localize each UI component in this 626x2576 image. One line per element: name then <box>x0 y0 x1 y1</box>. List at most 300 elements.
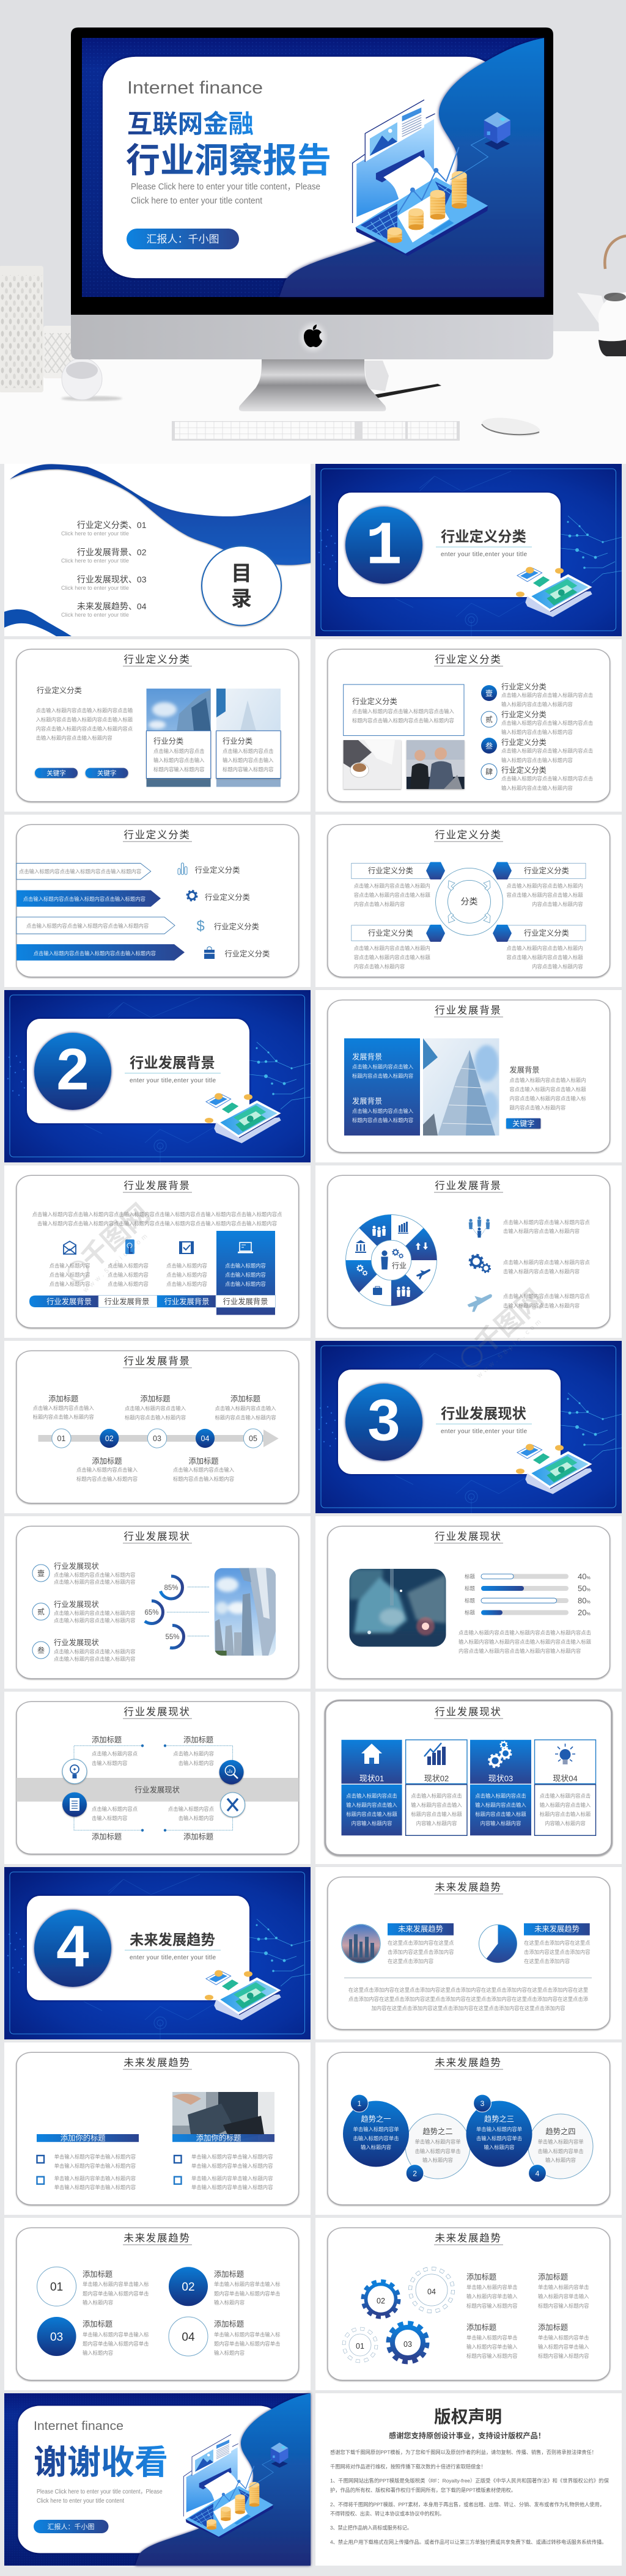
right text 3: 点击输入标题内容点击输入标题内容点 <box>503 1293 590 1299</box>
card 2: 行业分类 <box>223 737 252 746</box>
text bottom right <box>506 945 583 970</box>
card 现状03: 点击输入标题内容点击 <box>475 1793 526 1799</box>
lower paragraph: 加内容在这里点击添加内容这里点击添加内容在这里点击添加内容在这里点击添加内容 <box>371 2005 565 2011</box>
contents list: 行业发展现状、03 <box>77 574 147 584</box>
right text 2: 击输入标题内容点击输入标题内容 <box>503 1269 580 1275</box>
progress row 20%: 20% <box>578 1608 591 1617</box>
photo: hands with tablet <box>172 2092 274 2141</box>
header bar left <box>388 1923 454 1936</box>
badge 1 <box>350 2094 368 2112</box>
badge 1: 1 <box>357 2099 361 2108</box>
item 2: 点击输入标题内容点击输入标题内容 <box>54 1617 136 1623</box>
list item 1: 行业定义分类 <box>501 682 547 691</box>
text left: 击添加内容这里点击添加内容 <box>388 1949 454 1955</box>
notice body: 3、禁止把作品纳入商标或服务标记。 <box>330 2525 412 2531</box>
card 2: 点击输入标题内容点击 <box>223 748 273 754</box>
text bottom left: 标题内容输入标题内容 <box>466 2353 517 2359</box>
item 04: 输入标题内容 <box>214 2350 245 2356</box>
text top right: 点击输入标题内容点击输入标题内 <box>506 883 583 889</box>
highlighted column <box>216 1231 275 1315</box>
trend 3 circle: 击输入标题内容单击 <box>476 2135 522 2141</box>
right text: 内容点击输入标题内容点击输入标 <box>509 1096 586 1102</box>
hero subtitle: Please Click here to enter your title content，Please <box>131 182 320 192</box>
text top left: 点击输入标题内容点击输入标题内 <box>354 883 430 889</box>
top label 1: 标题内容点击输入标题内容 <box>33 1414 94 1420</box>
list item 4: 点击输入标题内容点击输入标题内容点击 <box>501 776 593 782</box>
contents list: 行业发展背景、02 <box>77 548 147 557</box>
notice body: 1、千图网网站出售的PPT模版是免版税类（RF：Royalty-free）正版受《中华人民共和国著作法》和《世界版权公约》的保 <box>330 2478 609 2484</box>
text top left: 单击输入标题内容单击 <box>466 2284 517 2291</box>
blue panel: 点击输入标题内容点击输入 <box>352 1108 414 1114</box>
text right: 在这里点击添加内容 <box>524 1958 570 1964</box>
text top right: 单击输入标题内容单击 <box>538 2284 589 2291</box>
text block <box>36 686 133 741</box>
keyboard <box>172 421 460 441</box>
card 现状03: 现状03 <box>488 1774 513 1783</box>
slide: copyright notice <box>315 2393 622 2566</box>
top label 3: 添加标题 <box>230 1395 260 1403</box>
item 01: 01 <box>50 2281 63 2294</box>
tab 2: 行业发展背景 <box>105 1297 149 1306</box>
bottom left wave <box>4 609 72 636</box>
list right 2 <box>174 2175 273 2190</box>
slide: section cover 3 <box>315 1341 622 1513</box>
card 现状02: 点击输入标题内容点击 <box>411 1793 462 1799</box>
ring 65% <box>141 1601 163 1623</box>
label top left: 击输入标题内容 <box>92 1760 127 1766</box>
central ring diagram <box>435 868 503 935</box>
node 04 <box>196 1429 215 1448</box>
subtitle <box>37 2489 163 2504</box>
list left 2: 单击输入标题内容单击输入标题内容 <box>54 2175 136 2181</box>
text card <box>344 684 464 736</box>
vase left <box>0 266 43 392</box>
text left <box>388 1940 454 1964</box>
teapot <box>577 236 626 356</box>
section subtitle: enter your title,enter your title <box>441 1428 527 1435</box>
node 01: 01 <box>57 1434 65 1443</box>
bottom label 1: 添加标题 <box>92 1457 122 1466</box>
text bottom left <box>354 945 431 970</box>
slide title: 行业发展现状 <box>435 1530 502 1543</box>
photo: coffee and laptop <box>344 740 401 789</box>
slide: thank you <box>4 2393 311 2566</box>
mouse <box>481 414 541 440</box>
wheel chart: 行业 <box>392 1261 407 1270</box>
label bottom left <box>92 1806 138 1841</box>
list left 1 <box>37 2154 136 2169</box>
section title: 行业定义分类 <box>441 529 526 545</box>
label with bag icon: 行业定义分类 <box>225 949 270 958</box>
text block: 击输入标题内容点击输入标题内容 <box>36 735 112 741</box>
notice body: 护，作品的所有权、版权和著作权归千图网所有，您下载的是PPT模版素材使用权。 <box>330 2487 516 2493</box>
monitor body <box>71 28 553 315</box>
section title: 未来发展趋势 <box>130 1932 215 1948</box>
header bar left: 未来发展趋势 <box>398 1924 443 1934</box>
card 2 <box>216 731 281 779</box>
hero: monitor mockup on desk <box>0 0 626 464</box>
reporter button <box>127 229 239 249</box>
hero subtitle <box>131 182 320 206</box>
list item 4: 肆 <box>485 768 493 776</box>
item 1: 点击输入标题内容点击输入标题内容 <box>54 1579 136 1585</box>
slide title: 行业发展背景 <box>435 1005 502 1016</box>
node 02: 02 <box>105 1434 114 1443</box>
list left 1: 单击输入标题内容单击输入标题内容 <box>54 2154 136 2160</box>
slide title: 未来发展趋势 <box>123 2057 191 2068</box>
contents circle <box>202 546 281 625</box>
illustration: tablet with money <box>516 567 592 617</box>
slide: current state, percent rings <box>4 1516 311 1689</box>
icon: tools <box>221 1793 245 1817</box>
card 现状03: 输入标题内容点击输入 <box>475 1802 526 1808</box>
gear 02 <box>363 2281 399 2317</box>
bottom label 1 <box>76 1457 138 1482</box>
progress row 50%: 50% <box>578 1584 591 1593</box>
item 1: 行业发展现状 <box>54 1561 99 1571</box>
text bottom right: 容点击输入标题内容点击输入标题 <box>506 955 583 961</box>
progress row 50%: 标题 <box>465 1585 476 1591</box>
list right 2: 单击输入标题内容单击输入标题内容 <box>191 2184 273 2190</box>
top label 3: 点击输入标题内容点击输入 <box>215 1406 276 1412</box>
trend 1 circle <box>343 2101 409 2167</box>
node 04: 04 <box>201 1434 209 1443</box>
list item 2: 输入标题内容点击输入标题内容 <box>501 729 573 735</box>
header bar right: 添加你的标题 <box>196 2133 241 2143</box>
badge 3: 3 <box>481 2099 485 2108</box>
right text: 题内容点击输入标题内容 <box>509 1105 565 1111</box>
list item 3: 行业定义分类 <box>501 738 547 747</box>
text bottom right <box>538 2323 589 2359</box>
ring 55%: 55% <box>165 1634 180 1641</box>
progress row 80%: 80% <box>578 1596 591 1605</box>
gear 01 <box>344 2328 377 2361</box>
text card: 行业定义分类 <box>352 697 397 706</box>
watermark 2: www.58pic.com <box>475 1316 545 1380</box>
card 现状04 <box>534 1740 595 1835</box>
reporter button: 汇报人：千小图 <box>147 233 219 245</box>
text top left: 输入标题内容单击输入 <box>466 2294 518 2300</box>
column text 4 <box>225 1263 266 1287</box>
list left 2: 单击输入标题内容单击输入标题内容 <box>54 2184 136 2190</box>
slide: development background, four columns <box>4 1165 311 1338</box>
text bottom right: 添加标题 <box>538 2323 568 2332</box>
arrow 2: 点击输入标题内容点击输入标题内容点击输入标题内容 <box>23 896 145 902</box>
item 02: 02 <box>182 2281 195 2294</box>
icon: film check <box>180 1242 193 1253</box>
numeral 2: 2 <box>56 1037 89 1103</box>
header bar left: 添加你的标题 <box>61 2133 106 2143</box>
keyword button: 关键字 <box>512 1118 534 1128</box>
trend 1 circle: 击输入标题内容单击 <box>353 2135 399 2141</box>
section title: 行业发展现状 <box>441 1406 526 1422</box>
item 2: 贰 <box>37 1607 45 1616</box>
column text 1 <box>50 1263 90 1287</box>
tab 1 <box>29 1296 98 1307</box>
top label 2: 添加标题 <box>140 1395 171 1403</box>
text top left: 内容点击输入标题内容 <box>354 901 405 907</box>
watermark 2: 千图网 <box>470 1284 550 1360</box>
intro text: 击输入标题内容点击输入标题内容点击输入标题内容点击输入标题内容点击输入标题内容点击输入标题内容 <box>37 1220 277 1227</box>
text block: 点击输入标题内容点击输入标题内容点击输 <box>36 708 133 714</box>
item 3: 点击输入标题内容点击输入标题内容 <box>54 1656 136 1662</box>
item 03: 添加标题 <box>83 2320 112 2328</box>
list item 4: 行业定义分类 <box>501 766 547 775</box>
wheel chart <box>346 1215 436 1305</box>
text bottom right: 点击输入标题内容点击输入标题内 <box>506 945 583 952</box>
bottom label 2: 标题内容点击输入标题内容 <box>173 1476 234 1482</box>
section subtitle: enter your title,enter your title <box>441 551 527 558</box>
trend 4 circle: 趋势之四 <box>545 2127 576 2136</box>
notice subtitle: 感谢您支持原创设计事业，支持设计版权产品！ <box>389 2431 545 2440</box>
keyword button <box>506 1118 540 1129</box>
notice body: 不得转授权、出卖、转让本协议或本协议中的权利。 <box>330 2511 444 2517</box>
item 2: 点击输入标题内容点击输入标题内容 <box>54 1610 136 1616</box>
trend 3 circle: 输入标题内容 <box>484 2145 515 2151</box>
trend 2 circle: 趋势之二 <box>422 2127 453 2136</box>
column text 3: 点击输入标题内容 <box>166 1281 207 1287</box>
bottom label 2 <box>173 1457 235 1482</box>
trend 4 circle: 击输入标题内容单击 <box>537 2148 584 2154</box>
label with dollar icon <box>196 918 259 934</box>
tab 4 <box>216 1295 275 1307</box>
node 05: 05 <box>249 1434 257 1443</box>
right text 1: 点击输入标题内容点击输入标题内容点 <box>503 1219 590 1225</box>
arrow 3: 点击输入标题内容点击输入标题内容点击输入标题内容 <box>26 923 149 929</box>
right text: 发展背景 <box>509 1065 540 1074</box>
node 03: 03 <box>153 1434 161 1443</box>
hero title line 1: 互联网金融 <box>127 110 254 138</box>
slide: section cover 1 <box>315 464 622 636</box>
item 03: 输入标题内容 <box>83 2350 113 2356</box>
progress row 80%: 标题 <box>465 1598 476 1604</box>
list left 2 <box>37 2175 136 2190</box>
arrow 1: 点击输入标题内容点击输入标题内容点击输入标题内容 <box>19 868 141 875</box>
blue panel: 标题内容点击输入标题内容 <box>352 1073 413 1079</box>
trend 1 circle: 趋势之一 <box>361 2115 391 2123</box>
text top right <box>538 2273 589 2309</box>
text top right: 内容点击输入标题内容 <box>532 901 583 907</box>
badge 2 <box>406 2165 424 2182</box>
contents list: Click here to enter your title <box>61 530 129 537</box>
top label 3 <box>215 1395 276 1420</box>
vase small <box>43 326 73 378</box>
text bottom left: 单击输入标题内容单击 <box>466 2335 517 2341</box>
list item 1 <box>481 682 593 708</box>
gear 02: 02 <box>377 2297 385 2305</box>
label top left: 点击输入标题内容点 <box>92 1751 138 1757</box>
slide: table of contents <box>4 464 311 636</box>
contents list: 行业定义分类、01 <box>77 520 147 530</box>
label bottom left: 点击输入标题内容点 <box>92 1806 138 1812</box>
column text 4: 点击输入标题内容 <box>225 1281 266 1287</box>
icon: clipboard <box>62 1793 87 1817</box>
ring 65%: 65% <box>144 1609 159 1616</box>
column text 3 <box>166 1263 207 1287</box>
timeline arrow <box>38 1429 279 1447</box>
photo: skyscraper blue sky <box>147 689 211 787</box>
keyword button 1 <box>35 768 78 778</box>
progress row 40%: 40% <box>578 1572 591 1581</box>
trend 2 circle <box>405 2114 470 2179</box>
contents list: Click here to enter your title <box>61 557 129 565</box>
central gray band <box>17 1778 298 1802</box>
column text 1: 点击输入标题内容 <box>50 1272 90 1278</box>
label bottom right: 行业定义分类 <box>524 928 569 938</box>
trend 1 circle: 输入标题内容 <box>361 2145 391 2151</box>
apple logo <box>301 324 325 351</box>
blue panel <box>344 1038 420 1136</box>
slide on screen <box>82 38 544 297</box>
trend 3 circle: 趋势之三 <box>484 2115 514 2123</box>
node 01 <box>52 1429 71 1448</box>
text bottom left: 点击输入标题内容点击输入标题内 <box>354 945 430 952</box>
text block: 行业定义分类 <box>37 686 82 695</box>
bottom label 2: 添加标题 <box>188 1457 219 1466</box>
label bottom right: 击输入标题内容 <box>179 1815 214 1821</box>
slide: current state, four cards <box>315 1692 622 1864</box>
card 现状01: 标题内容点击输入标题 <box>346 1811 397 1818</box>
thank you title: 谢谢收看 <box>34 2443 168 2481</box>
icon: people network <box>469 1217 490 1238</box>
right text 1: 击输入标题内容点击输入标题内容 <box>503 1228 580 1235</box>
item 04: 题内容单击输入标题内容单击 <box>214 2341 280 2347</box>
text card: 标题内容点击输入标题内容点击输入标题内容 <box>352 717 454 724</box>
english title: Internet finance <box>34 2420 123 2433</box>
lower paragraph: 在这里点击添加内容在这里点击添加内容这里点击添加内容在这里点击添加内容在这里点击添加内容在这里 <box>348 1987 588 1993</box>
right text: 点击输入标题内容点击输入标题内 <box>509 1077 586 1084</box>
list item 2: 点击输入标题内容点击输入标题内容点击 <box>501 720 593 726</box>
column text 1: 点击输入标题内容 <box>50 1263 90 1269</box>
item 3 <box>32 1638 136 1662</box>
keyword button 2 <box>86 768 128 778</box>
list item 1: 输入标题内容点击输入标题内容 <box>501 702 573 708</box>
badge 4 <box>529 2165 546 2182</box>
trend 2 circle: 单击输入标题内容单 <box>414 2139 461 2145</box>
slide title: 行业定义分类 <box>435 654 502 665</box>
dotted connectors <box>167 1587 210 1636</box>
card 现状01: 内容输入标题内容 <box>352 1821 392 1827</box>
card 2: 输入标题内容点击输入 <box>223 757 274 763</box>
monitor chin <box>71 315 553 359</box>
tab 3: 行业发展背景 <box>164 1297 209 1306</box>
item 04: 添加标题 <box>214 2320 244 2328</box>
watermark 1: 千图网 <box>76 1198 156 1274</box>
trend 4 circle: 输入标题内容 <box>545 2157 576 2163</box>
gear 01: 01 <box>356 2342 364 2350</box>
card 现状04: 现状04 <box>553 1774 578 1783</box>
card 现状04: 输入标题内容点击输入 <box>540 1802 591 1808</box>
item 01: 题内容单击输入标题内容单击 <box>83 2291 149 2297</box>
label bottom right <box>493 925 586 942</box>
contents list <box>61 520 147 618</box>
column text 4: 点击输入标题内容 <box>225 1263 266 1269</box>
hero english title: Internet finance <box>127 78 263 98</box>
list item 2: 贰 <box>485 715 493 724</box>
subtitle: Please Click here to enter your title content，Please <box>37 2489 163 2495</box>
item 03: 03 <box>50 2331 63 2344</box>
column text 2: 点击输入标题内容 <box>108 1263 149 1269</box>
list right 1: 单击输入标题内容单击输入标题内容 <box>191 2163 273 2169</box>
column text 4: 点击输入标题内容 <box>225 1272 266 1278</box>
column text 2: 点击输入标题内容 <box>108 1281 149 1287</box>
section title: 行业发展背景 <box>130 1055 215 1071</box>
label top left <box>92 1736 138 1766</box>
column text 2 <box>108 1263 149 1287</box>
card 1: 点击输入标题内容点击 <box>153 748 204 754</box>
ring 55% <box>161 1626 183 1648</box>
contents list: 未来发展趋势、04 <box>77 601 147 611</box>
watermark 1: www.58pic.com <box>81 1231 151 1294</box>
slide: development background, timeline <box>4 1341 311 1513</box>
arrow 4: 点击输入标题内容点击输入标题内容点击输入标题内容 <box>34 950 156 956</box>
card 1: 输入标题内容点击输入 <box>153 757 205 763</box>
central gray band: 行业发展现状 <box>134 1785 180 1794</box>
header bar left <box>37 2133 139 2143</box>
ring 85% <box>160 1576 182 1599</box>
dotted connectors <box>74 1745 233 1830</box>
text bottom right: 标题内容输入标题内容 <box>538 2353 589 2359</box>
trend 4 circle: 单击输入标题内容单 <box>537 2139 584 2145</box>
column text 3: 点击输入标题内容 <box>166 1263 207 1269</box>
badge 3 <box>474 2094 491 2112</box>
tab 1: 行业发展背景 <box>46 1297 92 1306</box>
photo: glass tower <box>423 1038 499 1136</box>
card 现状02: 标题内容点击输入标题 <box>411 1811 462 1818</box>
slide title: 行业发展背景 <box>435 1180 502 1192</box>
slide: future trends, gears <box>315 2218 622 2390</box>
list item 3: 点击输入标题内容点击输入标题内容点击 <box>501 748 593 754</box>
slide: current state, progress bars <box>315 1516 622 1689</box>
numeral 3: 3 <box>367 1388 400 1453</box>
bottom label 1: 点击输入标题内容点击输入 <box>76 1467 138 1473</box>
label with gear icon: 行业定义分类 <box>205 892 250 902</box>
notice body: 感谢您下载千图网原创PPT模板，为了您和千图网以及原创作者的利益，请勿复制、传播、销售，否则将承担法律责任！ <box>330 2449 597 2455</box>
icon: gears <box>470 1255 490 1272</box>
label with gear icon <box>187 890 250 902</box>
notice body: 2、不得将千图网的PPT模版、PPT素材，本身用于再出售，或者出租、出借、转让、分销、发布或者作为礼物供他人使用， <box>330 2501 605 2508</box>
badge 4: 4 <box>536 2170 540 2178</box>
icon: laptop <box>238 1242 253 1253</box>
item 01: 添加标题 <box>83 2270 112 2278</box>
central ring diagram: 分类 <box>461 897 478 906</box>
blue panel: 标题内容点击输入标题内容 <box>352 1117 413 1123</box>
slide title: 行业发展背景 <box>123 1180 191 1192</box>
list item 4: 输入标题内容点击输入标题内容 <box>501 785 573 791</box>
label top left <box>352 862 445 879</box>
progress row 20%: 标题 <box>465 1610 476 1616</box>
top label 1: 点击输入标题内容点击输入 <box>33 1405 94 1411</box>
card 现状02: 内容输入标题内容 <box>416 1821 457 1827</box>
item 04 <box>169 2317 280 2356</box>
badge 2: 2 <box>413 2170 417 2178</box>
gear 03 <box>388 2323 427 2362</box>
label with bag icon <box>204 947 270 959</box>
trend 4 circle <box>528 2114 593 2179</box>
body text <box>458 1629 592 1654</box>
arrow 1 <box>17 863 151 879</box>
item 1: 点击输入标题内容点击输入标题内容 <box>54 1572 136 1578</box>
item 01 <box>37 2267 149 2306</box>
notice body: 千图网将对作品进行维权，按照传播下载次数的十倍进行索取赔偿金！ <box>330 2464 486 2470</box>
gear 04 <box>410 2269 453 2311</box>
slide: section cover 4 <box>4 1867 311 2039</box>
slide: future trends, numbered circles <box>4 2218 311 2390</box>
card 1 <box>147 731 211 779</box>
slide title: 行业定义分类 <box>123 829 191 841</box>
slide title: 行业发展背景 <box>123 1356 191 1367</box>
slide title: 未来发展趋势 <box>435 1881 502 1893</box>
